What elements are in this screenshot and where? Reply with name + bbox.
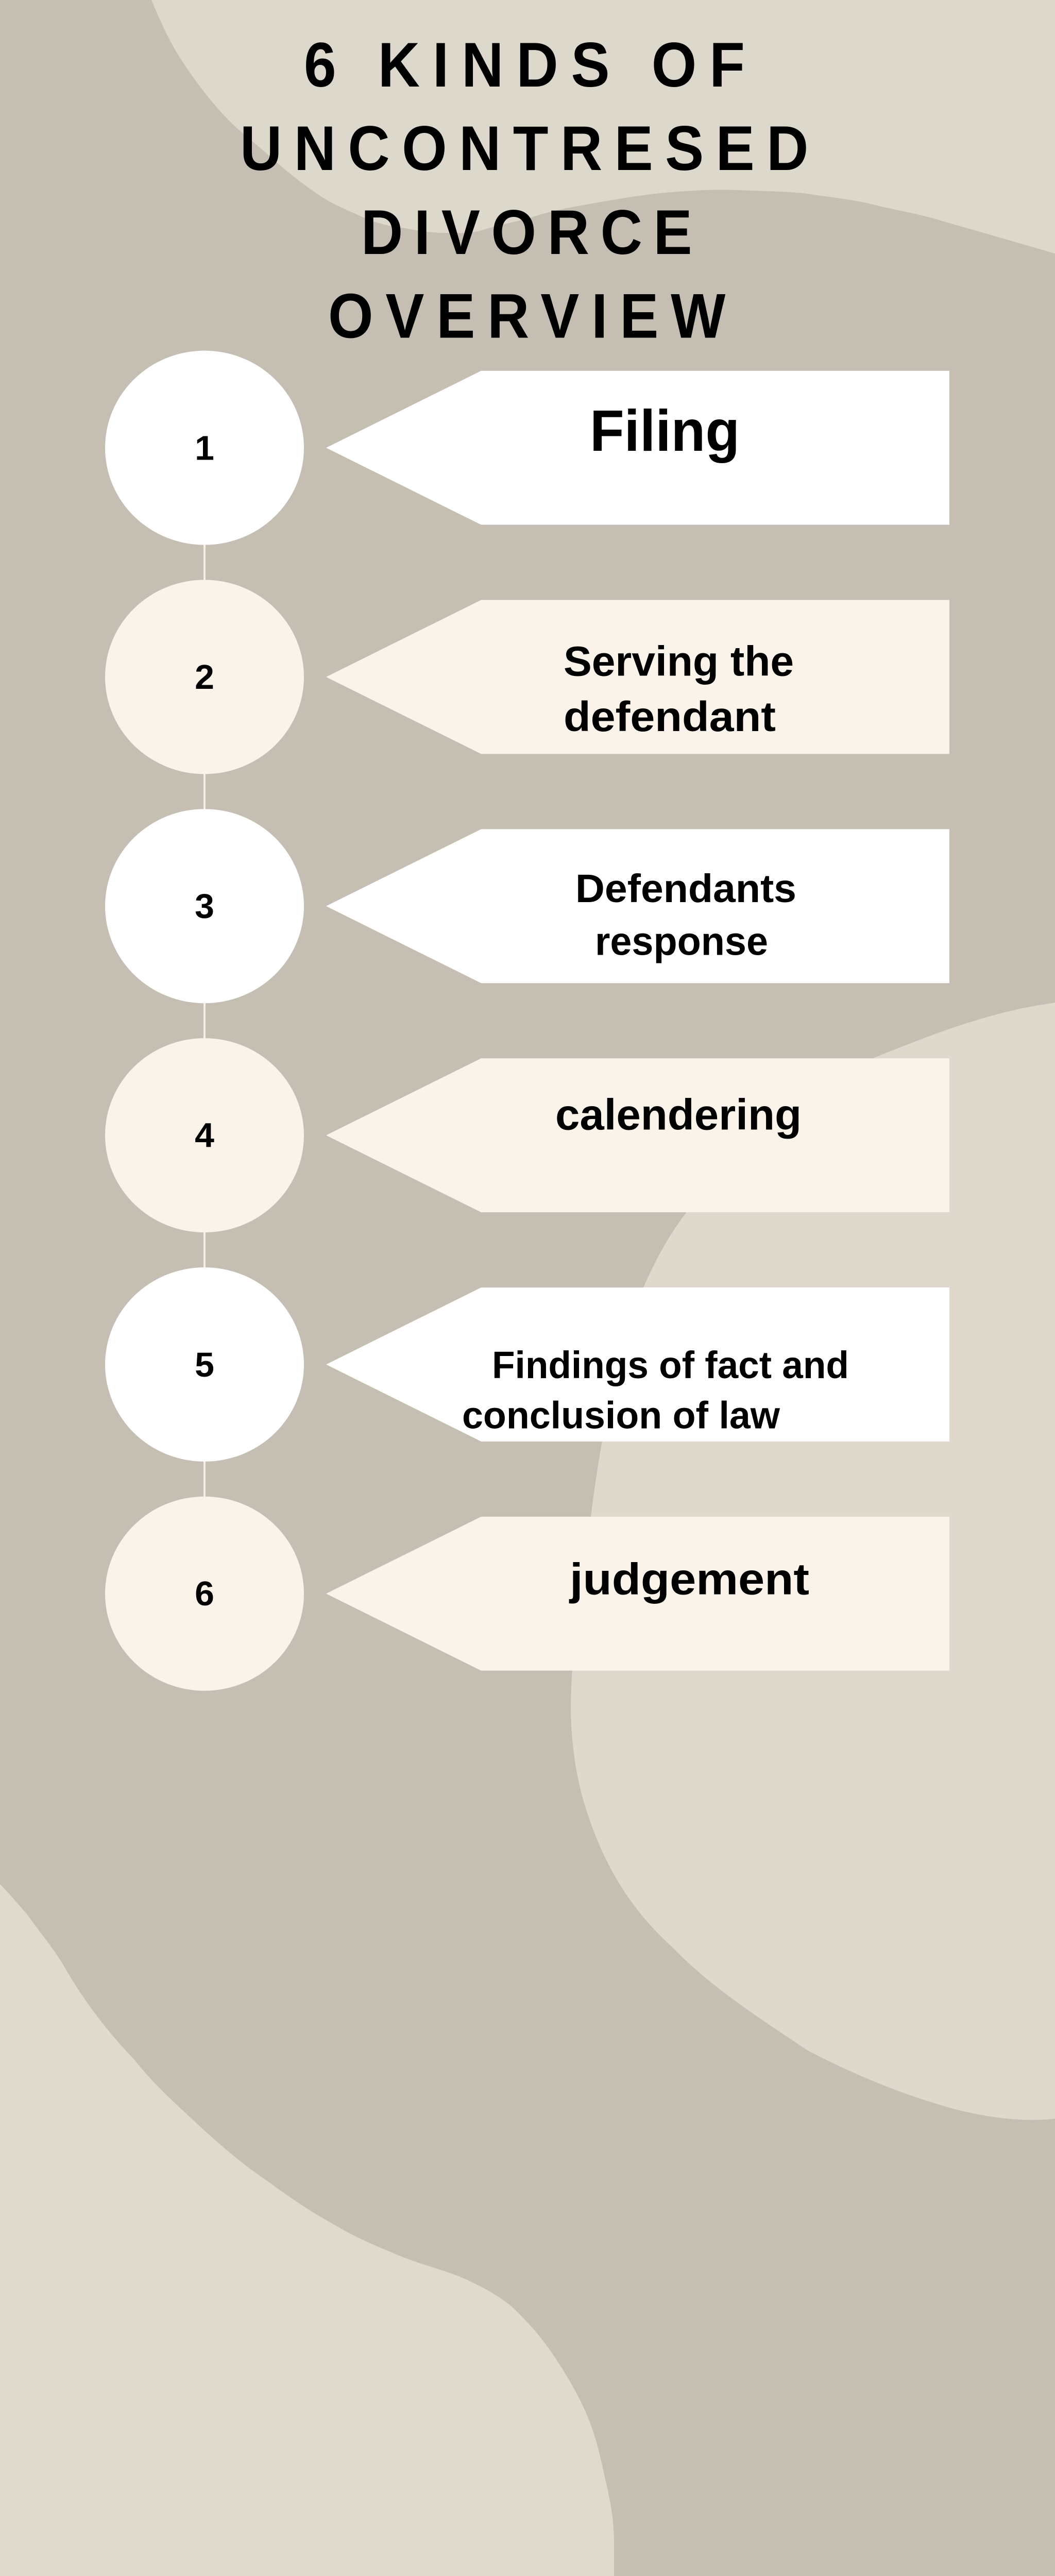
step 4 arrow — [326, 1058, 949, 1212]
step 3 — [105, 809, 949, 1003]
step 5 circle — [105, 1267, 304, 1462]
step 5 — [105, 1267, 949, 1462]
blob: top right — [151, 0, 1055, 253]
step 6 number: 6 — [195, 1575, 214, 1613]
step 1 arrow — [326, 371, 949, 525]
step 4 circle — [105, 1038, 304, 1232]
step 2 — [105, 580, 949, 774]
connector lines — [203, 544, 206, 1500]
title: 6 KINDS OF — [304, 30, 745, 100]
step 2 circle — [105, 580, 304, 774]
step 6 label: judgement — [569, 1555, 809, 1604]
step 4 — [105, 1038, 949, 1232]
step 1 circle — [105, 351, 304, 545]
step 3 label: Defendants — [575, 866, 796, 911]
step 2 arrow — [326, 600, 949, 754]
step 4 number: 4 — [195, 1116, 214, 1155]
step 2 label: Serving the — [564, 637, 794, 685]
step 4 label: calendering — [555, 1091, 802, 1139]
blob: middle right — [571, 1003, 1055, 2120]
title: UNCONTRESED — [240, 113, 808, 183]
title: OVERVIEW — [328, 281, 725, 351]
step 3 number: 3 — [195, 888, 214, 926]
step 2 label: defendant — [564, 693, 776, 740]
step 6 circle — [105, 1497, 304, 1691]
step 1 number: 1 — [195, 429, 214, 467]
step 1 label: Filing — [590, 398, 740, 464]
step 2 number: 2 — [195, 658, 214, 697]
step 3 arrow — [326, 829, 949, 983]
title: DIVORCE — [361, 197, 692, 267]
step 6 — [105, 1497, 949, 1691]
step 6 arrow — [326, 1517, 949, 1671]
step 5 arrow — [326, 1287, 949, 1442]
step 1 — [105, 351, 949, 545]
step 5 label: Findings of fact and — [492, 1344, 849, 1386]
title — [240, 30, 808, 351]
blob: bottom left — [0, 1884, 614, 2576]
step 5 number: 5 — [195, 1346, 214, 1384]
step 5 label: conclusion of law — [462, 1394, 780, 1436]
step 3 label: response — [595, 919, 768, 963]
step 3 circle — [105, 809, 304, 1003]
